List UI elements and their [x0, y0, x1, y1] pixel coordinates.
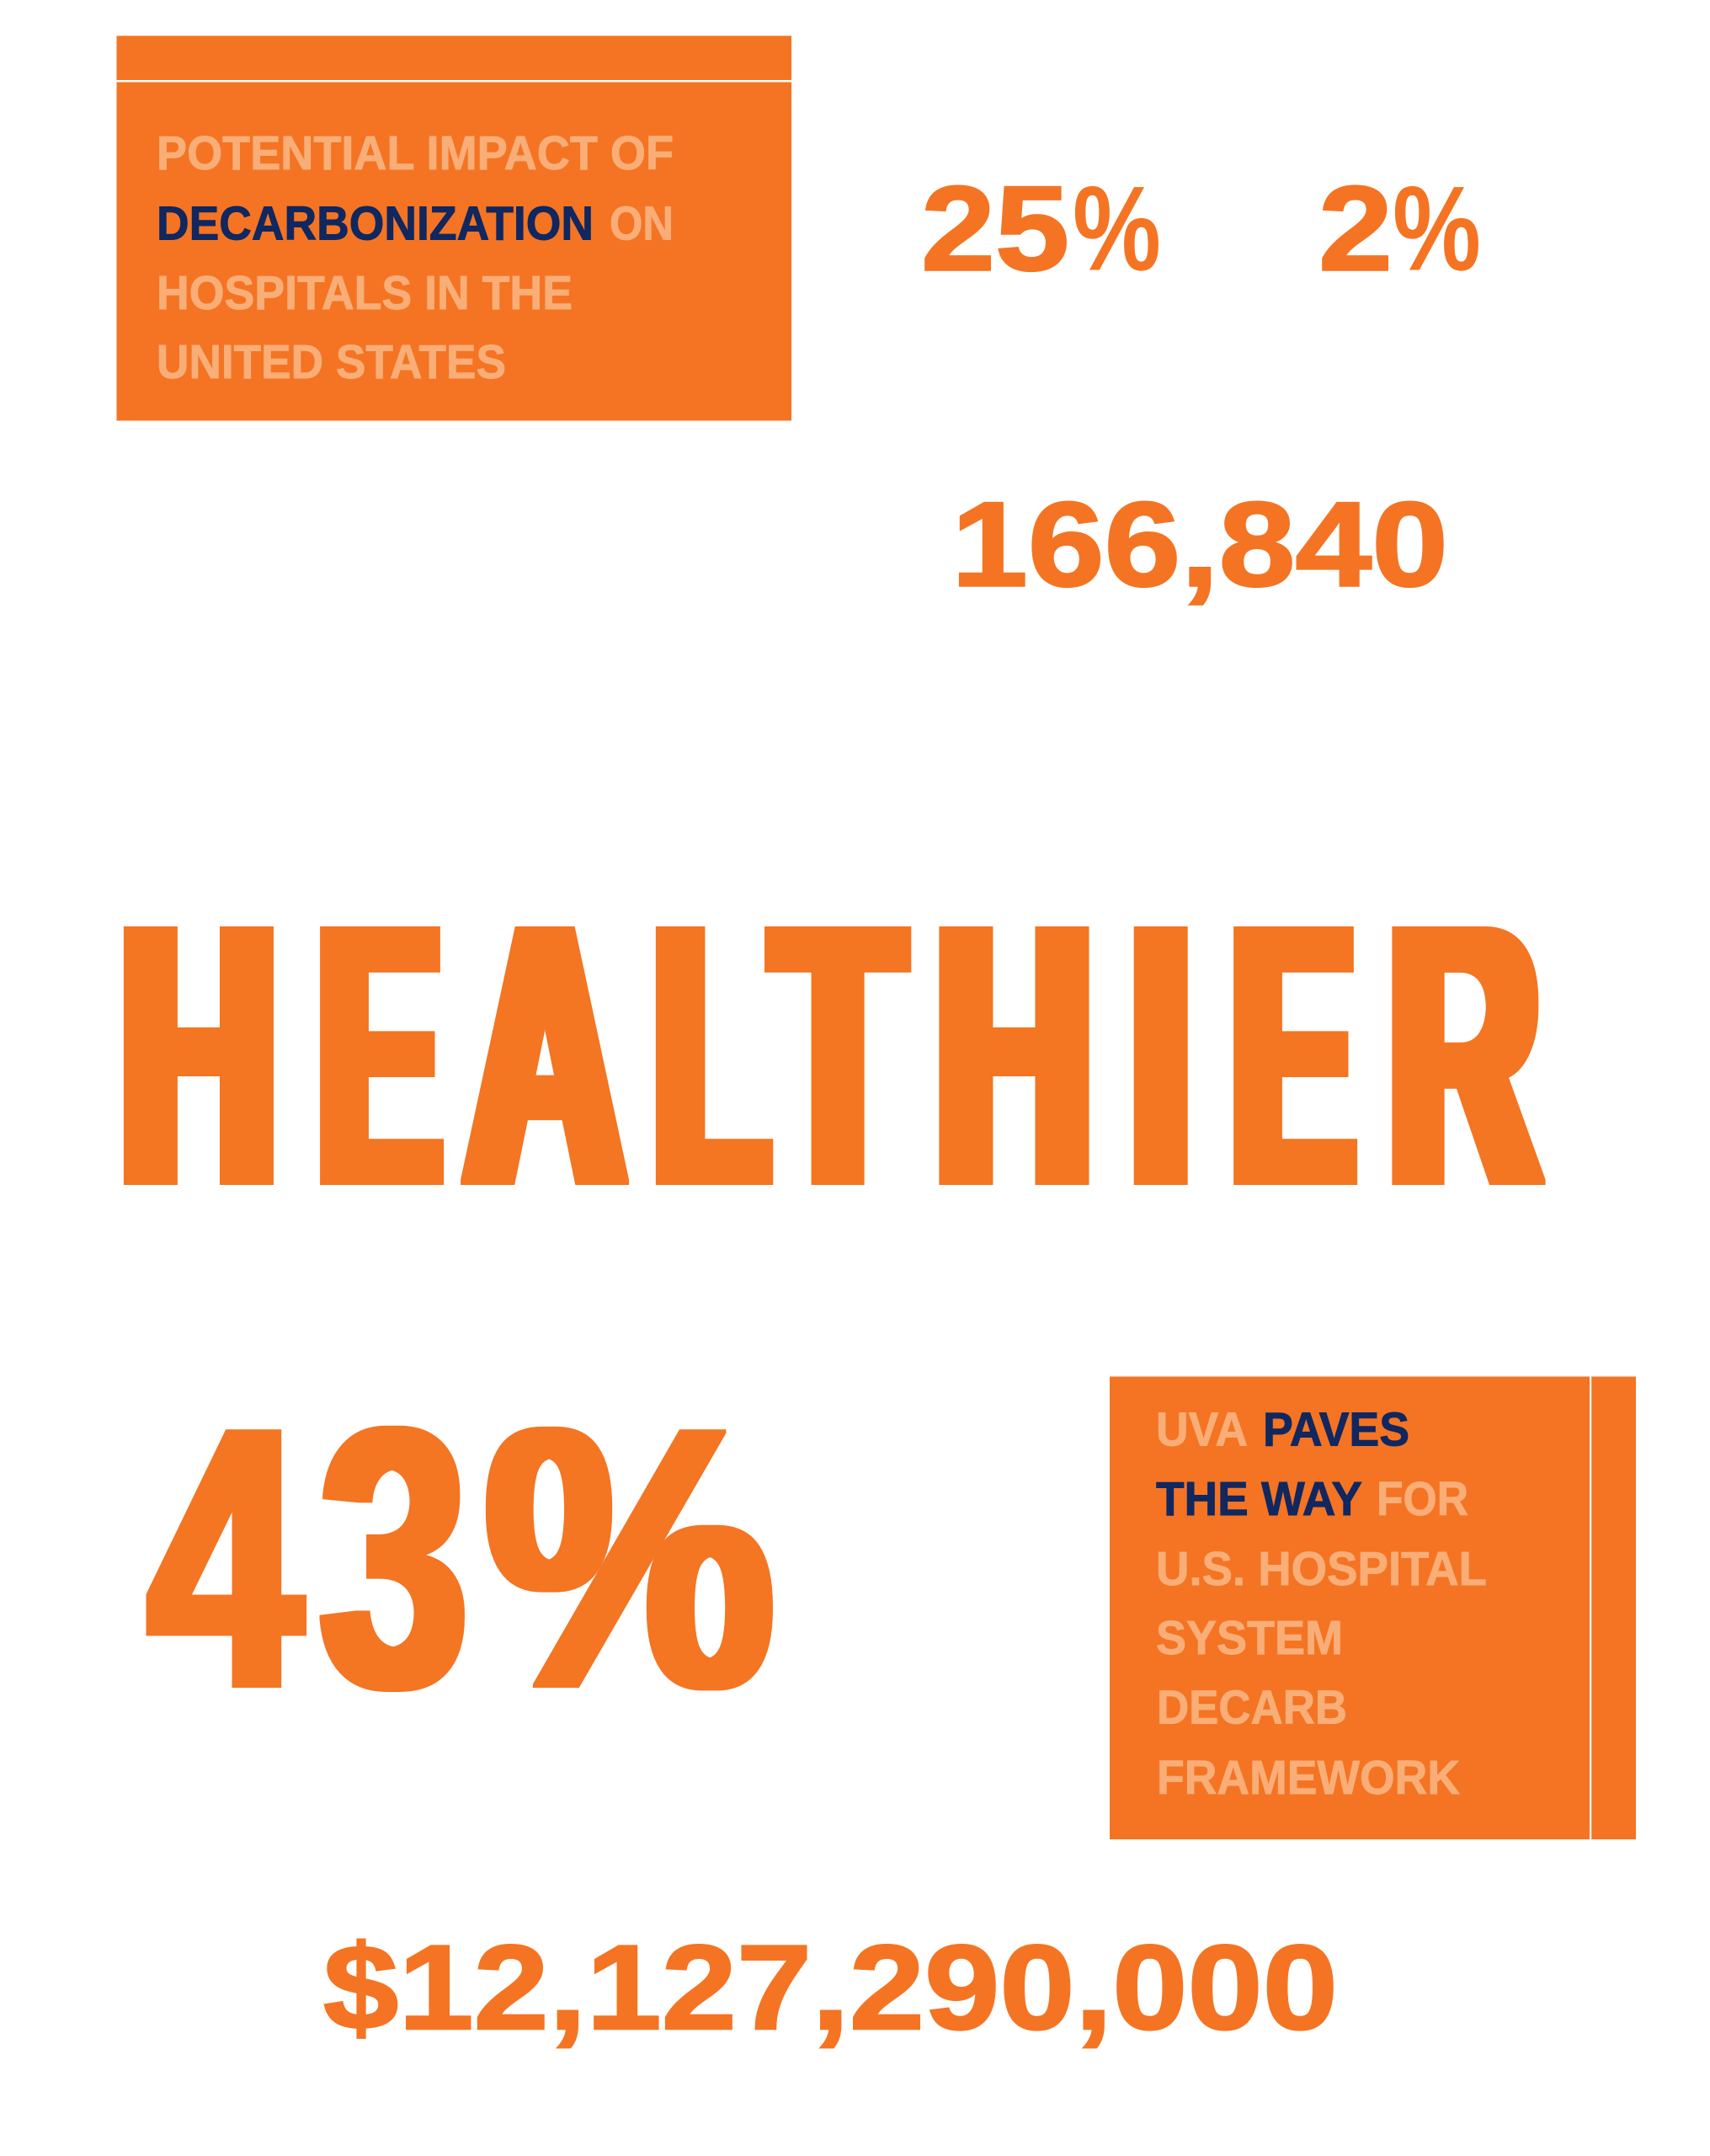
headline word: HEALTHIER: T [774, 851, 903, 1262]
stat: $12,127,290,000: $12,127,290,000 [323, 1921, 1338, 2055]
stat: 2% [1318, 162, 1481, 296]
stat: 43%: 3 [320, 1350, 467, 1765]
panel: UVA paves the way [1110, 1376, 1636, 1839]
headline word: HEALTHIER: H [120, 851, 277, 1262]
panel text: FOR [1377, 1472, 1468, 1526]
stat: 25%: 25 [921, 162, 1069, 296]
panel text: UVA [1156, 1403, 1248, 1457]
panel text [1156, 1403, 1487, 1805]
heading text: HOSPITALS IN THE [157, 266, 573, 320]
stat: 43%: 4 [149, 1350, 303, 1765]
heading text [157, 126, 674, 389]
stat: 2%: % [1393, 162, 1481, 296]
white vertical rule [1590, 1376, 1591, 1839]
heading text: POTENTIAL IMPACT OF [157, 126, 674, 180]
heading text: UNITED STATES [157, 335, 506, 389]
panel background [1110, 1376, 1636, 1839]
panel text: SYSTEM [1156, 1611, 1343, 1665]
panel text: FRAMEWORK [1157, 1751, 1460, 1805]
panel text: THE WAY [1156, 1472, 1362, 1526]
stat: 43% [149, 1350, 775, 1765]
headline word: HEALTHIER: E [1233, 851, 1353, 1262]
headline word: HEALTHIER [120, 851, 1538, 1262]
heading text: DECARBONIZATION [157, 197, 594, 251]
stat: 166,840: 166,840 [951, 478, 1448, 611]
headline word: HEALTHIER: L [655, 851, 768, 1262]
stat: 2%: 2 [1318, 162, 1393, 296]
panel text: PAVES [1263, 1403, 1409, 1457]
headline word: HEALTHIER: A [466, 851, 623, 1262]
headline word: HEALTHIER: H [936, 851, 1092, 1262]
panel background [116, 35, 791, 421]
panel text: DECARB [1157, 1681, 1347, 1735]
headline word: HEALTHIER: E [319, 851, 439, 1262]
heading text: ON [610, 197, 674, 251]
panel: potential impact heading [116, 35, 791, 421]
headline word: HEALTHIER: I [1131, 851, 1191, 1262]
white rule across panel [116, 80, 791, 83]
headline word: HEALTHIER: R [1389, 851, 1538, 1262]
stat: 25%: % [1073, 162, 1161, 296]
stat: 25% [921, 162, 1161, 296]
stat: 43%: % [484, 1350, 775, 1765]
panel text: U.S. HOSPITAL [1156, 1542, 1487, 1596]
